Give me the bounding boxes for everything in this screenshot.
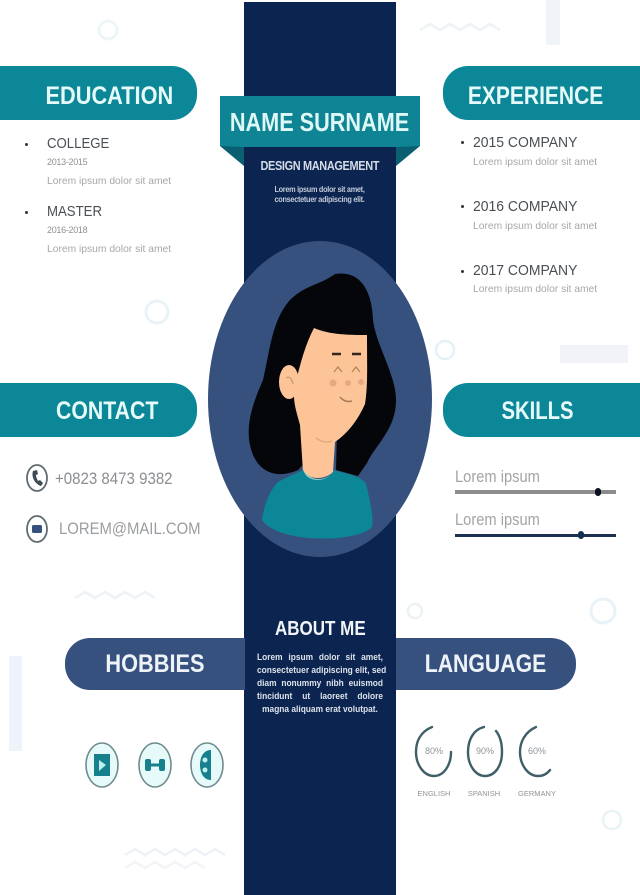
language labels: GERMANY — [518, 789, 556, 798]
about me text: consectetuer adipiscing elit, sed — [257, 665, 386, 675]
education entries: COLLEGE — [47, 135, 109, 152]
contact: phone — [26, 464, 173, 492]
experience entries: 2017 COMPANY — [473, 262, 577, 279]
heading: skills: SKILLS — [501, 397, 573, 425]
language labels: 60% — [528, 746, 546, 756]
about me text: Lorem ipsum dolor sit amet, — [257, 652, 383, 662]
about me text: tincidunt ut laoreet dolore — [257, 691, 383, 701]
experience entries: Lorem ipsum dolor sit amet — [473, 156, 597, 168]
education entries: MASTER — [47, 203, 102, 220]
name text: NAME SURNAME — [230, 109, 410, 137]
education entries: 2013-2015 — [47, 157, 87, 167]
subtitle: DESIGN MANAGEMENT — [261, 159, 379, 173]
education entries: 2016-2018 — [47, 225, 87, 235]
heading: skills — [443, 383, 640, 437]
skill sliders — [455, 468, 616, 539]
heading: hobbies: HOBBIES — [105, 650, 205, 678]
skill sliders: Lorem ipsum — [455, 511, 540, 529]
contact: phone: +0823 8473 9382 — [55, 469, 173, 488]
skill sliders: Lorem ipsum — [455, 468, 540, 486]
language labels: 80% — [425, 746, 443, 756]
intro text: consectetuer adipiscing elit. — [275, 195, 365, 204]
heading: experience — [443, 66, 640, 120]
heading: experience: EXPERIENCE — [468, 82, 604, 110]
contact: mail: LOREM@MAIL.COM — [59, 519, 201, 538]
education entries: Lorem ipsum dolor sit amet — [47, 175, 171, 187]
experience entries: 2016 COMPANY — [473, 198, 577, 215]
about me heading: ABOUT ME — [275, 618, 365, 640]
heading: language: LANGUAGE — [425, 650, 547, 678]
central navy column — [244, 2, 396, 895]
heading: hobbies — [65, 638, 245, 690]
experience entries: Lorem ipsum dolor sit amet — [473, 283, 597, 295]
language labels: 90% — [476, 746, 494, 756]
education entries: Lorem ipsum dolor sit amet — [47, 243, 171, 255]
language labels — [418, 746, 556, 798]
heading: language — [396, 638, 576, 690]
contact: mail — [26, 515, 201, 543]
intro text — [274, 185, 365, 204]
experience entries — [461, 134, 597, 295]
about me text: magna aliquam erat volutpat. — [262, 704, 378, 714]
language labels: ENGLISH — [418, 789, 450, 798]
heading: education — [0, 66, 197, 120]
experience entries: Lorem ipsum dolor sit amet — [473, 220, 597, 232]
about me text: diam nonummy nibh euismod — [257, 678, 383, 688]
about me text — [257, 652, 386, 714]
heading: education: EDUCATION — [46, 82, 173, 110]
education entries — [25, 135, 171, 255]
language labels: SPANISH — [468, 789, 500, 798]
intro text: Lorem ipsum dolor sit amet, — [275, 185, 365, 194]
heading: contact — [0, 383, 197, 437]
heading: contact: CONTACT — [56, 397, 158, 425]
experience entries: 2015 COMPANY — [473, 134, 577, 151]
